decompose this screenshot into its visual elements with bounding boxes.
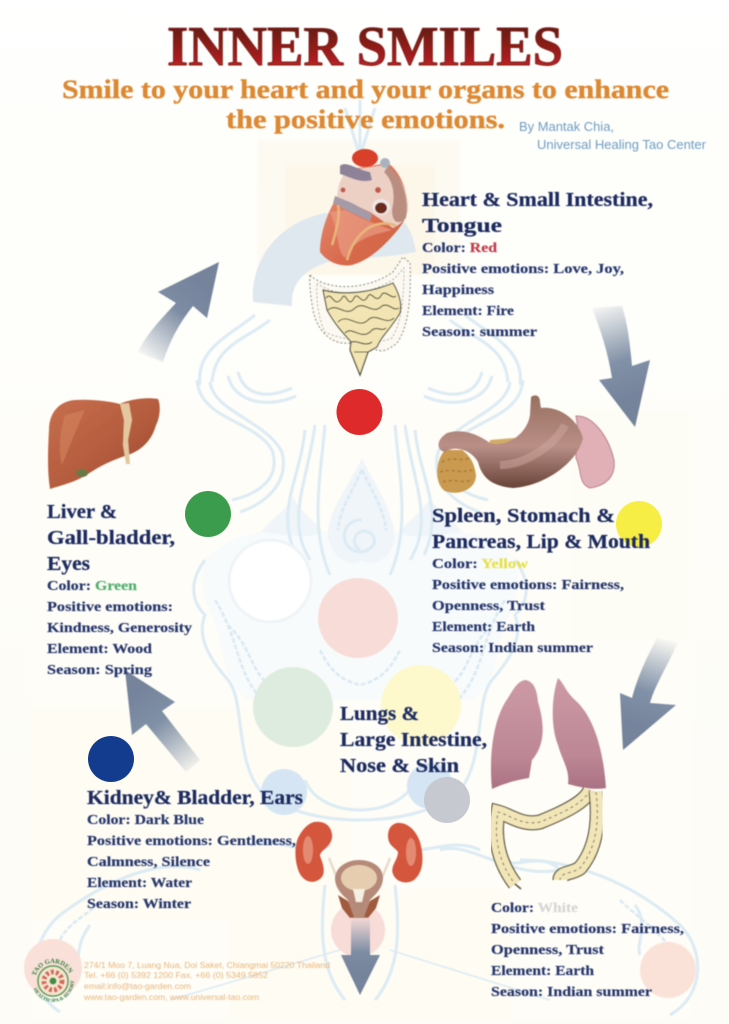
- heading: liver block: [47, 501, 192, 677]
- icon: kidneys and bladder: [295, 822, 422, 918]
- circle: green: [185, 491, 231, 537]
- heading: liver block: Kindness, Generosity: [47, 620, 192, 635]
- heading: liver block: Gall-bladder,: [47, 527, 175, 549]
- icon: small intestine: [310, 257, 410, 375]
- heading: kidney block: Positive emotions: Gentleness,: [87, 833, 296, 848]
- circle: red: [336, 389, 382, 435]
- heading: spleen block: Pancreas, Lip & Mouth: [432, 531, 650, 553]
- heading: heart block: Element: Fire: [422, 303, 514, 318]
- text block: lungs details: Element: Earth: [491, 963, 595, 978]
- heading: lungs: Nose & Skin: [340, 755, 459, 777]
- arrow: kidney to liver: [125, 670, 200, 772]
- icon: large intestine: [496, 790, 597, 889]
- heading: lungs: Lungs &: [340, 703, 419, 725]
- heading: heart block: Season: summer: [422, 324, 537, 339]
- halo arc behind heart: [253, 213, 416, 306]
- logo: Tao Garden: TAO GARDEN: [31, 958, 74, 976]
- background: pale watermark panels: [30, 140, 692, 1020]
- text block: lungs details: Season: Indian summer: [491, 984, 652, 999]
- footer contact text: [83, 961, 330, 1002]
- circle: yellow: [616, 501, 662, 547]
- heading: liver block: Positive emotions:: [47, 599, 173, 614]
- icon: heart: [320, 149, 408, 265]
- icon: liver: [48, 398, 160, 489]
- circle: dark blue: [88, 736, 134, 782]
- subtitle: [62, 74, 669, 134]
- arrow: heart to spleen: [592, 306, 650, 427]
- text block: lungs details: Color: White: [491, 900, 578, 915]
- heading: spleen block: Spleen, Stomach &: [432, 505, 615, 527]
- pale chakra circles: [24, 540, 696, 998]
- heading: heart block: Heart & Small Intestine,: [422, 189, 653, 211]
- heading: heart block: [422, 189, 653, 339]
- text block: lungs details: Positive emotions: Fairness,: [491, 921, 684, 936]
- footer contact text: email:info@tao-garden.com: [84, 982, 191, 991]
- byline: By Mantak Chia,: [519, 120, 614, 134]
- icon: stomach, pancreas and spleen: [437, 395, 614, 493]
- heading: lungs: Large Intestine,: [340, 729, 487, 751]
- heading: spleen block: Season: Indian summer: [432, 640, 593, 655]
- text block: lungs details: Openness, Trust: [491, 942, 605, 957]
- heading: liver block: Element: Wood: [47, 641, 153, 656]
- arrow: liver to heart: [138, 262, 219, 362]
- heading: liver block: Eyes: [47, 553, 90, 575]
- subtitle: Smile to your heart and your organs to enhance: [62, 74, 669, 104]
- heading: spleen block: Color: Yellow: [432, 556, 528, 571]
- arrow: spleen to lungs: [620, 638, 678, 750]
- heading: kidney block: Season: Winter: [87, 896, 191, 911]
- byline: [519, 120, 706, 152]
- arrow: lungs to kidney downwards: [341, 918, 380, 995]
- logo: Tao Garden: HEALTH SPA & RESORT: [33, 980, 75, 1003]
- heading: heart block: Happiness: [422, 282, 494, 297]
- byline: Universal Healing Tao Center: [537, 138, 706, 152]
- text block: lungs details: [491, 900, 684, 999]
- subtitle: the positive emotions.: [226, 104, 505, 134]
- heading: kidney block: Calmness, Silence: [87, 854, 210, 869]
- heading: kidney block: Element: Water: [87, 875, 192, 890]
- heading: kidney block: Kidney& Bladder, Ears: [87, 787, 303, 809]
- heading: lungs: [340, 703, 487, 777]
- heading: heart block: Positive emotions: Love, Joy,: [422, 261, 624, 276]
- heading: spleen block: Element: Earth: [432, 619, 536, 634]
- footer contact text: 274/1 Moo 7, Luang Nua, Doi Saket, Chiangmai 50220 Thailand: [84, 961, 330, 970]
- heading: spleen block: Openness, Trust: [432, 598, 546, 613]
- heading: liver block: Color: Green: [47, 578, 138, 593]
- footer contact text: www.tao-garden.com, www.universal-tao.com: [83, 993, 259, 1002]
- heading: spleen block: [432, 505, 650, 655]
- heading: spleen block: Positive emotions: Fairness,: [432, 577, 624, 592]
- heading: liver block: Liver &: [47, 501, 117, 523]
- heading: heart block: Color: Red: [422, 240, 498, 255]
- icon: lungs: [491, 678, 606, 789]
- title: INNER SMILES: [167, 16, 563, 78]
- heading: liver block: Season: Spring: [47, 662, 152, 677]
- heading: kidney block: Color: Dark Blue: [87, 812, 204, 827]
- footer contact text: Tel. +66 (0) 5392 1200 Fax. +66 (0) 5349 5852: [84, 971, 269, 980]
- heading: heart block: Tongue: [422, 215, 502, 237]
- logo: Tao Garden: [31, 958, 75, 1003]
- heading: kidney block: [87, 787, 303, 911]
- circle: grey: [424, 777, 470, 823]
